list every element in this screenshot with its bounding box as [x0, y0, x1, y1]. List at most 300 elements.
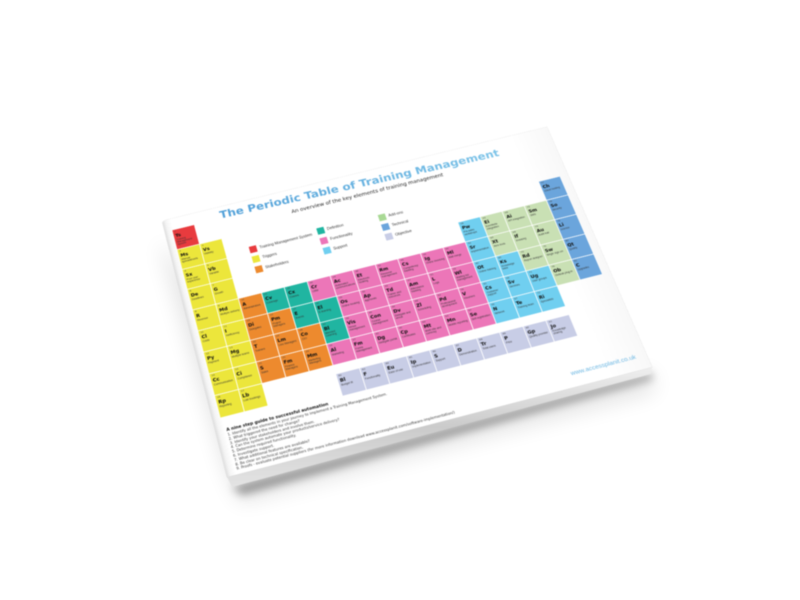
element: El: El — [317, 304, 323, 311]
element: Zl: Zl — [416, 302, 422, 308]
element: Ks: 65 — [498, 256, 502, 259]
element: Dv — [389, 300, 419, 326]
element: Ai — [502, 206, 532, 231]
element: Ob — [549, 260, 580, 286]
element: I: I — [224, 328, 227, 334]
element: Mm: Mm — [306, 351, 318, 359]
element: L — [428, 268, 458, 294]
element: Ml — [443, 242, 473, 268]
element: Am — [405, 273, 435, 300]
element: Li — [554, 214, 585, 239]
element: Cs — [398, 253, 428, 279]
element: Ch — [538, 176, 568, 200]
element: Cx: 26 — [287, 287, 290, 290]
element: Qt: Quality — [569, 246, 578, 251]
element: So: So — [550, 202, 558, 208]
element: Ot: Ot — [476, 264, 485, 270]
element: F — [359, 362, 390, 390]
element: Co: 28 — [299, 328, 303, 332]
booklet page — [162, 127, 652, 477]
element: S: 21 — [258, 362, 262, 365]
element: Vb — [205, 258, 233, 284]
element: Rp — [214, 390, 244, 418]
element: Ei: 63 — [482, 217, 486, 220]
element: Lb: Lost bookings — [243, 395, 261, 402]
element: Ei: Ei — [483, 219, 490, 225]
element: E: 27 — [293, 307, 297, 311]
element: P — [500, 326, 531, 354]
element: Pw: 58 — [460, 222, 464, 225]
legend: Add-ons: Add-ons — [388, 210, 404, 218]
element: Cc: 14 — [211, 374, 215, 377]
element: Ts: Ts — [175, 232, 181, 238]
element: Ch: 77 — [540, 181, 544, 184]
element: Co — [297, 323, 326, 350]
legend: Objective — [384, 229, 412, 241]
element: Md: 9 — [218, 304, 220, 307]
element: Sv: Services — [509, 283, 520, 288]
element: D: Demonstration — [459, 349, 477, 356]
legend: Functionality — [319, 232, 353, 246]
element: Sm: Sm — [528, 207, 538, 214]
element: N: 62 — [491, 303, 495, 306]
element: Eu: 84 — [385, 362, 389, 365]
element: Cc: Cc — [212, 376, 220, 383]
element: S: S — [259, 365, 264, 371]
element: C — [571, 254, 603, 280]
element: V: V — [461, 291, 467, 297]
element: So: 78 — [549, 200, 553, 203]
element: Rm: 42 — [378, 264, 381, 267]
element: Cr — [307, 276, 336, 302]
element: Ch: Ch — [542, 183, 550, 189]
nine step guide text block: 8. Be clear on technical specification. — [235, 445, 304, 466]
element: Li: 79 — [557, 220, 561, 223]
element: T — [250, 334, 280, 362]
element: Au: Au — [536, 227, 545, 234]
element: Di: Delegates — [249, 326, 262, 331]
element: Dg — [373, 326, 403, 354]
element: Md — [215, 299, 244, 325]
element: Sv: 66 — [506, 276, 510, 280]
element: Zl: Scheduling — [418, 306, 431, 311]
element: Fm — [280, 350, 309, 378]
element: Py — [203, 346, 232, 374]
element: Ri: Ri — [538, 294, 545, 300]
element: R: R — [196, 313, 201, 319]
element: Cc: Communication — [214, 379, 233, 386]
element: Vb: 5 — [207, 264, 209, 267]
legend: Stakeholders — [254, 260, 290, 274]
element: T: 20 — [252, 340, 256, 343]
element: Con: Con — [369, 312, 382, 320]
nine step guide text block: 7. What additional features are available? — [234, 439, 310, 462]
element: S — [430, 344, 461, 372]
element: Ac: Automated communications — [335, 282, 355, 290]
element: S: Sales — [261, 370, 268, 374]
element: R: Revenue — [197, 317, 208, 322]
element: Mt: 49 — [422, 320, 426, 324]
element: Pd — [435, 288, 465, 315]
website url: www.accessplanit.co.uk — [570, 354, 637, 377]
element: D: D — [457, 347, 463, 353]
element: Vis: Vis — [346, 319, 356, 326]
chrome / objective element band — [336, 314, 578, 396]
element: Bl: Budget fit — [341, 381, 353, 387]
element: Ig: Ig — [424, 256, 431, 262]
element: Ml: 54 — [445, 247, 449, 251]
element: F: Functionality — [365, 374, 381, 381]
element: C: Upgrades — [577, 266, 590, 271]
element: Tr: 88 — [479, 338, 483, 341]
element: Tr — [476, 332, 508, 360]
element: Zl: 48 — [414, 299, 418, 303]
element: Ms: Ms — [180, 251, 189, 258]
element: Ac: 34 — [332, 276, 336, 279]
element: Sm — [524, 200, 554, 225]
element: Vs: Visibility — [204, 251, 214, 255]
element: Fm — [350, 332, 380, 360]
element: Di: 19 — [247, 319, 250, 322]
element: Eu: Eu — [386, 364, 395, 371]
element: Rm — [375, 259, 405, 285]
element: Cv: Cv — [265, 295, 273, 301]
element: Au — [532, 220, 563, 245]
element: Md: Md — [219, 306, 228, 313]
legend: Technical — [380, 219, 409, 232]
element: Rd: Rd — [522, 253, 531, 259]
nine step guide text block: A nine step guide to successful automation — [226, 402, 329, 432]
element: Ob: Ob — [552, 267, 562, 274]
element: Td: 43 — [384, 285, 388, 288]
element: Con — [366, 305, 396, 332]
legend: Triggers — [250, 252, 278, 264]
legend: Support: Support — [333, 244, 348, 251]
element: Mg — [227, 340, 256, 368]
element: Se — [465, 303, 496, 330]
element: Ci: 15 — [235, 368, 239, 371]
element: Md: Multiple delivery — [220, 309, 240, 316]
element: E: E — [294, 311, 299, 316]
element: Dg: Delegate portal — [378, 337, 397, 344]
element: Lm: Line Managers — [278, 340, 297, 347]
element: G: G — [213, 287, 218, 292]
element: Ks — [495, 251, 526, 277]
element: Ig: 50 — [423, 253, 427, 256]
element: Ip — [406, 350, 437, 378]
element: Se: Se — [469, 311, 478, 318]
element: Eu: Ease of use — [388, 368, 403, 374]
element: Sw: 75 — [543, 245, 547, 248]
element: Mt: Mt — [423, 322, 432, 329]
element: Mm: Marketing Managers — [308, 357, 322, 365]
element: Bl — [336, 368, 366, 396]
legend: Stakeholders: Stakeholders — [265, 260, 289, 269]
element: Cr: Cr — [310, 284, 318, 290]
element: Gp: 90 — [525, 326, 529, 329]
element: Li: Licence — [560, 226, 570, 231]
element: Et: Et — [356, 272, 363, 279]
element: Xt: Xt — [491, 239, 499, 245]
element: De: 6 — [189, 290, 192, 293]
element: Ml: Ml — [446, 250, 454, 256]
element: Ci: Compliance — [237, 374, 252, 380]
element: Sw: Sw — [544, 247, 554, 253]
element: Rd: 70 — [520, 250, 524, 254]
element: Ts — [172, 225, 199, 250]
element: Ip: 85 — [409, 356, 413, 359]
legend: Functionality: Functionality — [330, 232, 353, 241]
element: De: De — [190, 291, 199, 298]
element: So — [546, 195, 577, 220]
element: Se: 57 — [468, 309, 472, 312]
element: Ac: Ac — [333, 278, 341, 284]
element: Rd — [518, 245, 549, 271]
element: Mt — [419, 315, 450, 342]
element: Vis — [343, 311, 373, 338]
element: El: 31 — [316, 302, 320, 305]
element: Al: 33 — [329, 344, 333, 347]
element: Pm: 23 — [270, 313, 274, 317]
element: Dg: Dg — [376, 334, 386, 341]
element: C: 81 — [574, 259, 578, 262]
element: Cp — [396, 320, 427, 348]
element: Ch: Cloud hosting — [544, 186, 560, 192]
element: I: Inefficiency — [226, 331, 240, 337]
element: Vs — [199, 239, 227, 264]
element: Di — [244, 313, 273, 340]
element: Py: Payment — [208, 359, 219, 364]
element: Cs — [481, 277, 511, 303]
element: C: C — [575, 262, 581, 268]
element: Os: Os — [340, 298, 348, 305]
element: Ai: Ai — [506, 214, 513, 219]
nine step guide text block: 4. Can the system automate your products/service delivery? — [230, 417, 340, 449]
element: Cl: Costs — [202, 339, 210, 343]
element: Mt: Multi-site and currency — [425, 326, 442, 335]
legend: Objective: Objective — [395, 229, 412, 237]
element: Au: 74 — [535, 225, 539, 228]
element: Se: Self-registration — [471, 314, 491, 321]
element: G — [210, 278, 238, 304]
element: Rp: 16 — [217, 396, 221, 399]
element: Ri: 72 — [537, 291, 541, 294]
element: Li: Li — [558, 222, 565, 228]
element: Cp: Certificates — [402, 333, 416, 338]
element: Sr — [465, 236, 495, 262]
element: Rm: Resource management — [380, 271, 397, 278]
element: Bl: Blended Learning — [325, 330, 337, 337]
element: Td — [382, 279, 412, 305]
element: Ob: 76 — [551, 265, 555, 268]
element: Qt — [563, 234, 594, 260]
element: Co: CIO — [302, 337, 307, 341]
element: Vb: Variable — [209, 270, 219, 275]
element: Pd: 52 — [437, 294, 441, 297]
element: Td: Trainer and resources — [387, 291, 402, 299]
element: I — [221, 319, 250, 346]
element: D: 87 — [456, 344, 460, 347]
element: Fm: 37 — [352, 338, 356, 341]
element: Vis: 36 — [345, 317, 349, 320]
element: Di: Di — [247, 322, 255, 328]
element: Cx: Cx — [288, 289, 296, 296]
element: Py: Py — [206, 354, 215, 361]
legend: Definition: Definition — [326, 223, 344, 231]
element: Cv — [261, 287, 290, 313]
element: E — [290, 302, 320, 329]
element: Sm: SMS — [530, 213, 536, 217]
legend: Definition — [316, 223, 344, 236]
element: Dv: Delegate and venue — [394, 311, 411, 320]
element: Fm: 25 — [282, 356, 286, 359]
title: The Periodic Table of Training Management — [218, 147, 501, 221]
element: Ms: Manual spreadsheets — [181, 256, 198, 263]
element: Ot: 60 — [475, 262, 479, 265]
element: Sx: 4 — [184, 270, 186, 272]
legend: Technical: Technical — [391, 220, 409, 227]
element: Tr: Tr — [480, 341, 487, 347]
element: Dv: Dv — [393, 307, 401, 314]
element: F: 83 — [362, 368, 366, 371]
element: Pw: Pw — [461, 224, 471, 231]
element: F: F — [363, 371, 368, 377]
element: If: If — [514, 233, 519, 239]
element: Ug: User groups — [532, 277, 547, 283]
element: Sv — [503, 271, 534, 297]
element: Ml: Mail merge — [448, 253, 462, 259]
element: Gp: Gp — [527, 328, 536, 335]
element: S — [256, 356, 286, 384]
element: Cl — [198, 325, 227, 352]
element: Mg: 13 — [229, 346, 233, 349]
element: Sw — [540, 239, 571, 265]
element: Jo — [546, 315, 578, 342]
element: E: Events — [295, 315, 304, 320]
element: Rp: Rp — [218, 398, 227, 405]
element: Ug: Ug — [530, 273, 539, 279]
element: Ts: Training Management System — [176, 237, 192, 246]
element: Pm: Pm — [271, 315, 281, 322]
element: V: Vouchers — [463, 295, 475, 300]
element: T: Trainers — [255, 348, 265, 353]
element: Mm: 29 — [305, 350, 309, 353]
element: Bl: Bl — [323, 325, 330, 332]
element: Ug: 71 — [528, 271, 532, 274]
element: Jo: Knowledge sharing — [552, 327, 566, 335]
element: Te: 67 — [514, 297, 518, 300]
element: Cr: 30 — [309, 281, 313, 284]
element: Pw: Pre-sales workshops — [463, 229, 477, 236]
element: Wl: Waiting list management — [456, 274, 473, 282]
element: Fm: Fm — [353, 340, 363, 347]
element: Cs: 61 — [483, 282, 487, 285]
element: Xt: Xero tools — [493, 242, 506, 248]
element: Ei: Eventbrite integration — [486, 223, 499, 230]
element: Pm: Project Managers — [272, 321, 286, 328]
element: Sr: 59 — [468, 242, 472, 245]
element: Xt: 64 — [490, 236, 494, 239]
element: Os: 35 — [339, 296, 343, 299]
element: Et — [353, 264, 382, 290]
element: Ap: 39 — [362, 290, 365, 293]
element: So: Security — [552, 207, 562, 211]
subtitle: An overview of the key elements of training management — [291, 172, 444, 215]
element: Ri: Specialists — [540, 298, 554, 303]
element: L: L — [431, 276, 436, 282]
element: Cs: Cs — [401, 261, 409, 267]
element: Ts: 1 — [174, 230, 176, 233]
element: Am: Attendance tracking — [410, 285, 424, 293]
element: Os — [336, 290, 366, 317]
element: Sx: Poor user experience — [186, 276, 201, 283]
element: Lm: 24 — [276, 334, 280, 338]
element: Mn: Mn — [446, 316, 456, 323]
element: Zl — [412, 294, 442, 320]
element: Ms: 2 — [179, 250, 181, 252]
nine step guide text block: 6. Investigate support. — [233, 443, 275, 458]
element: Cv: 22 — [264, 293, 268, 296]
element: Xt — [488, 231, 518, 256]
element: Cx: Classes — [289, 294, 299, 299]
element: S: 86 — [432, 350, 436, 353]
element: Mn: Mobile reporting — [448, 319, 468, 327]
nine step guide text block: 2. What triggered the need for change? — [228, 419, 300, 441]
element: Rp: Reporting — [219, 403, 232, 408]
element: Ms — [177, 244, 205, 269]
element: Cs: Cs — [484, 284, 493, 291]
element: De: Deadlines — [192, 296, 204, 301]
element: A: Administrators — [243, 304, 261, 310]
element: Ot: Online training — [479, 267, 496, 274]
element: Ci: Ci — [236, 370, 243, 377]
element: Et: Electronic booking — [358, 276, 370, 284]
element: Ks: Ks — [499, 258, 507, 265]
legend: Add-ons — [377, 210, 404, 222]
element: Mg: Mg — [230, 348, 240, 355]
element: Sx: Sx — [185, 271, 193, 278]
element: Cs: Competency tracking — [403, 264, 419, 273]
element: Ac — [330, 270, 359, 296]
element: Bl — [320, 317, 350, 344]
element: If: 69 — [512, 231, 516, 234]
element: Sw: Single sign-on — [546, 250, 564, 257]
element: If: Invoicing — [516, 237, 527, 242]
element: Wl: 55 — [453, 267, 457, 271]
element: Rm: Rm — [379, 266, 389, 273]
element: Con: Course management — [371, 318, 389, 326]
element: Mg: Multiple teams — [231, 352, 250, 358]
element: Rd: Report designer — [524, 255, 543, 262]
element: Os: Online booking — [342, 301, 360, 308]
element: Vs: Vs — [202, 246, 210, 252]
element: Bl: 32 — [322, 323, 326, 326]
element: Dg: 41 — [375, 332, 379, 335]
element: Cr: CRM — [312, 289, 319, 293]
element: Mm — [303, 344, 333, 372]
element: Lb: 17 — [241, 389, 245, 393]
element: V — [458, 282, 488, 309]
element: Sr: Sr — [469, 244, 476, 250]
element: Cl: 10 — [200, 331, 204, 334]
element: Ap — [359, 285, 389, 311]
element: Lm — [273, 329, 303, 356]
element: D — [453, 338, 484, 366]
element: N: Network — [494, 310, 505, 315]
element: Te — [511, 291, 543, 318]
element: G: Growth — [215, 291, 224, 295]
element: G: 7 — [212, 284, 214, 287]
